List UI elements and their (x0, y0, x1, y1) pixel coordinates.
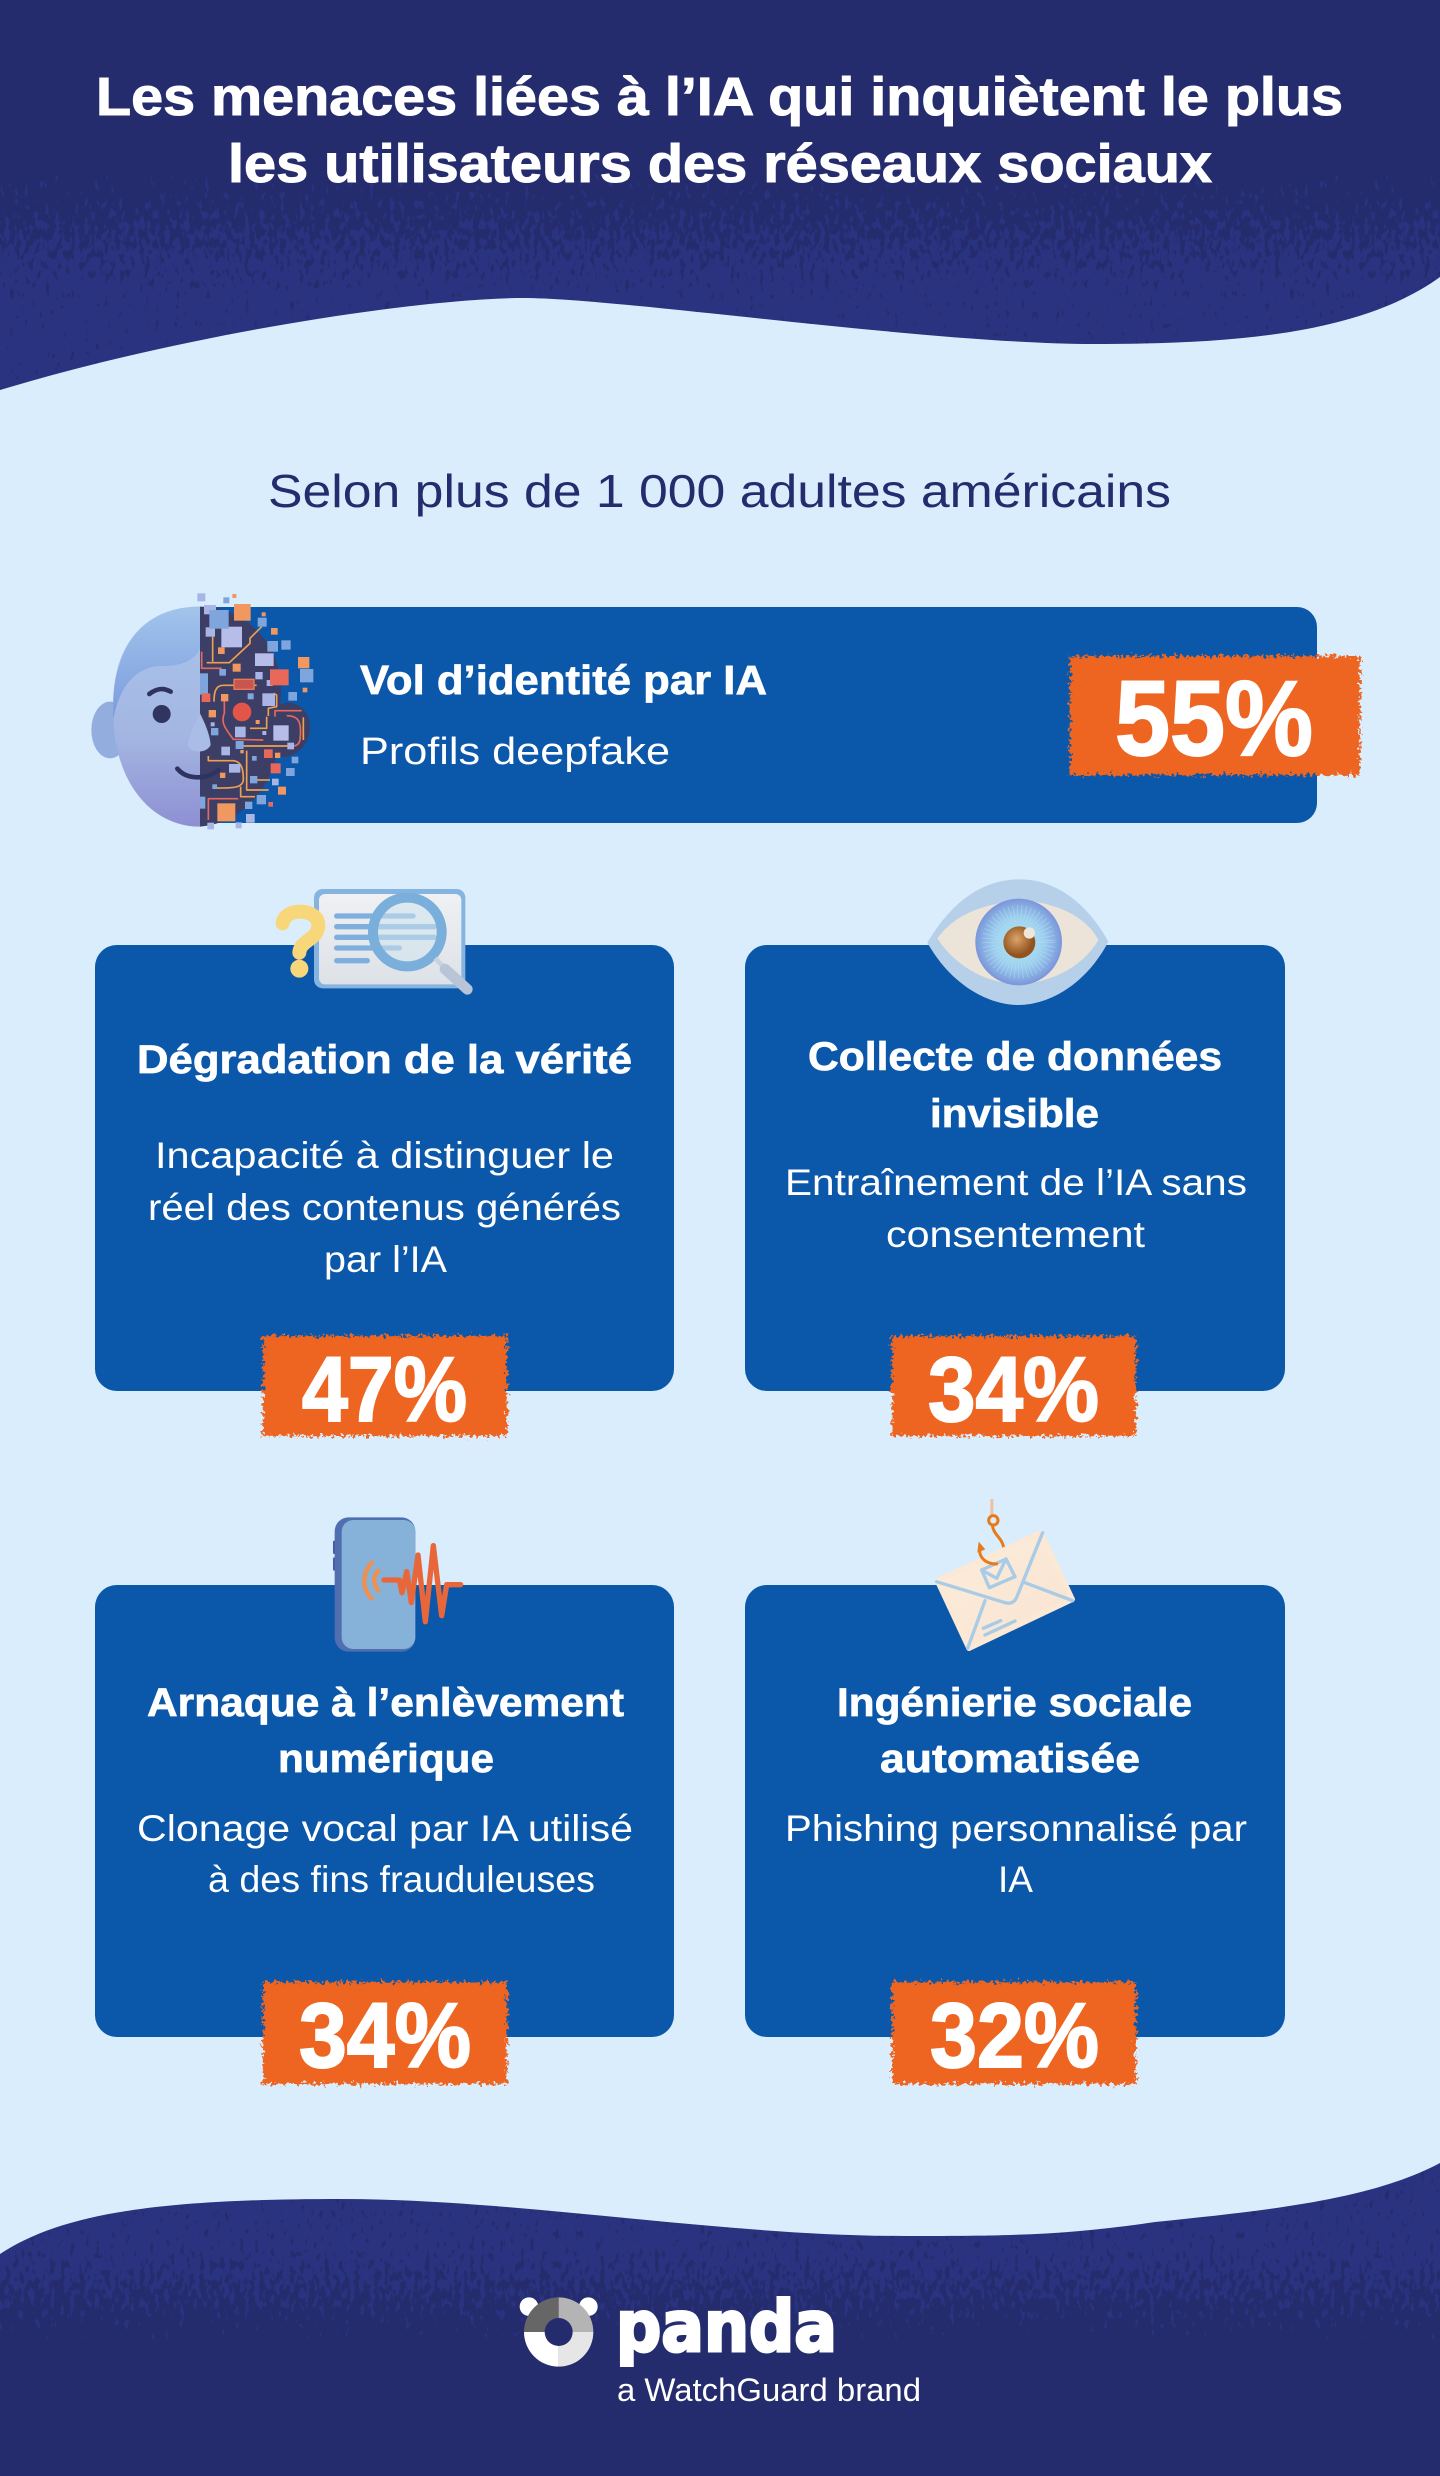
card background (745, 1585, 1285, 2037)
description: Phishing personnalisé par (785, 1808, 1247, 1849)
icon: panda mark (520, 2297, 598, 2367)
badge: 34%: 34% (299, 1985, 471, 2087)
title: les utilisateurs des réseaux sociaux (228, 134, 1212, 194)
subtitle: Selon plus de 1 000 adultes américains (268, 465, 1171, 517)
icon: half face half circuit head (91, 593, 313, 829)
heading: Arnaque à l’enlèvement (147, 1681, 624, 1725)
description: à des fins frauduleuses (208, 1859, 595, 1900)
icon: magnifier over document with question mark (283, 889, 467, 989)
description (785, 1808, 1247, 1900)
logo: panda a WatchGuard brand (520, 2286, 921, 2408)
panel: ingénierie sociale automatisée (745, 1499, 1285, 2087)
description: par l’IA (324, 1239, 447, 1280)
card background (180, 607, 1317, 823)
wordmark: panda (616, 2286, 837, 2368)
heading: invisible (930, 1092, 1099, 1136)
description: Clonage vocal par IA utilisé (137, 1808, 633, 1849)
description: Profils deepfake (360, 731, 670, 773)
description (148, 1135, 621, 1280)
description: Entraînement de l’IA sans (785, 1162, 1247, 1203)
icon: envelope on fishing hook (937, 1499, 1073, 1648)
title (96, 67, 1343, 194)
heading: Vol d’identité par IA (360, 657, 767, 703)
badge: 55%: 55% (1115, 658, 1313, 778)
description: IA (998, 1859, 1033, 1900)
description: consentement (886, 1214, 1146, 1255)
description (785, 1162, 1247, 1255)
heading: Ingénierie sociale (837, 1681, 1192, 1725)
badge: 32%: 32% (930, 1985, 1099, 2087)
panel: dégradation de la vérité (95, 889, 674, 1441)
tagline: a WatchGuard brand (617, 2372, 921, 2408)
heading (837, 1681, 1192, 1781)
panel: vol d'identité par IA (91, 593, 1360, 829)
panel: collecte de données invisible (745, 879, 1285, 1441)
card background (95, 945, 674, 1391)
card background (745, 945, 1285, 1391)
heading: automatisée (880, 1737, 1140, 1781)
description: réel des contenus générés (148, 1187, 621, 1228)
icon: phone with voice waveform (333, 1517, 461, 1652)
panel: arnaque à l'enlèvement numérique (95, 1517, 674, 2087)
title: Les menaces liées à l’IA qui inquiètent le plus (96, 67, 1343, 127)
description (137, 1808, 633, 1900)
heading: Collecte de données (808, 1035, 1222, 1079)
badge: 34%: 34% (928, 1339, 1099, 1441)
card background (95, 1585, 674, 2037)
icon: eye (927, 879, 1108, 1005)
description: Incapacité à distinguer le (155, 1135, 614, 1176)
heading: Dégradation de la vérité (137, 1038, 632, 1082)
heading (808, 1035, 1222, 1136)
heading (147, 1681, 624, 1781)
badge: 47%: 47% (302, 1339, 467, 1441)
heading: numérique (278, 1737, 494, 1781)
